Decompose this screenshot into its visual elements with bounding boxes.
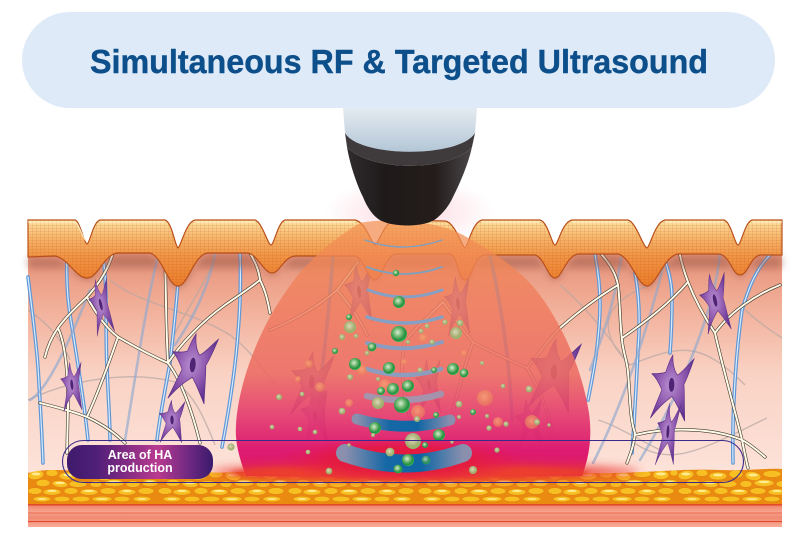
applicator black tip bbox=[347, 147, 472, 226]
collagen fibres bbox=[40, 253, 780, 468]
muscle layer bbox=[28, 504, 782, 527]
fat layer bbox=[28, 469, 782, 505]
faint orange bubbles bbox=[295, 334, 539, 429]
blue vessels bbox=[28, 253, 770, 463]
heat spread into fat bbox=[210, 437, 640, 483]
label: area of HA production: production bbox=[107, 461, 173, 475]
area of HA production outline bbox=[62, 440, 744, 482]
fibroblast cells bbox=[60, 265, 732, 467]
title banner: Simultaneous RF & Targeted Ultrasound bbox=[90, 43, 708, 80]
title banner bbox=[22, 12, 775, 108]
applicator light housing bbox=[343, 108, 477, 152]
dermis layer bbox=[28, 250, 782, 475]
applicator ring bbox=[345, 133, 475, 166]
hyaluronic acid spheres bbox=[332, 270, 476, 473]
ultrasound applicator bbox=[343, 108, 477, 226]
skin cross-section bbox=[28, 220, 782, 527]
epidermis shadow bbox=[28, 255, 782, 288]
connective grey fibres bbox=[28, 270, 782, 455]
label: area of HA production bbox=[67, 445, 213, 479]
ultrasound waves bbox=[345, 240, 463, 464]
pale spheres bbox=[227, 319, 551, 474]
label: area of HA production: Area of HA bbox=[108, 448, 172, 462]
glow above skin bbox=[325, 178, 495, 246]
epidermis layer bbox=[28, 220, 782, 286]
RF heat dome bbox=[236, 221, 590, 476]
